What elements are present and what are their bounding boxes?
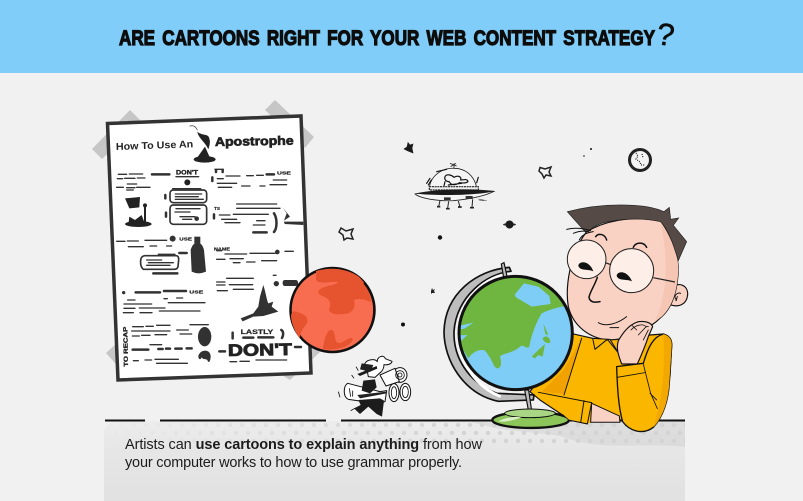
caption text: Artists can use cartoons to explain anything from how bbox=[125, 437, 483, 453]
glasses bbox=[567, 240, 675, 293]
rounded example boxes bbox=[170, 190, 207, 224]
star filled bbox=[404, 142, 413, 153]
forearm left sleeve bbox=[538, 338, 620, 424]
table line bbox=[105, 420, 685, 422]
hand bbox=[617, 321, 653, 364]
globe bbox=[453, 270, 572, 390]
ear bbox=[671, 285, 688, 306]
tiny ringed planet bbox=[503, 220, 516, 228]
poster heading: Apostrophe bbox=[215, 134, 294, 149]
face shading bbox=[654, 221, 678, 323]
stars and small space objects bbox=[339, 142, 650, 326]
head bbox=[364, 356, 392, 377]
tape strips bbox=[92, 100, 320, 380]
scroll bundle bbox=[400, 383, 411, 401]
USE label: USE bbox=[277, 171, 292, 177]
poster lower half: USE bbox=[189, 289, 204, 295]
poster heading: How To Use An bbox=[116, 139, 193, 153]
speech bubble bbox=[141, 256, 179, 269]
LASTLY DON'T panel: DON'T bbox=[228, 340, 292, 360]
mountain icon bbox=[241, 285, 278, 321]
head bbox=[567, 219, 678, 340]
poster heading bbox=[116, 134, 294, 153]
bottom text panel bbox=[104, 421, 685, 501]
UFO bbox=[415, 163, 494, 209]
hair bbox=[567, 205, 687, 261]
poster middle bbox=[117, 236, 230, 251]
poster: How to use an apostrophe bbox=[108, 116, 311, 380]
poster top half bbox=[116, 126, 303, 232]
poster middle: USE bbox=[179, 237, 193, 243]
caption text: your computer works to how to use grammar properly. bbox=[125, 455, 462, 471]
small island icon bbox=[125, 197, 152, 227]
eyebrows bbox=[596, 234, 647, 247]
rolled sleeve bbox=[617, 334, 672, 432]
hair wisps bbox=[567, 228, 593, 240]
shirt body bbox=[530, 334, 672, 423]
star outline right bbox=[539, 167, 551, 178]
dark clothing bbox=[354, 366, 384, 417]
cartoon character carrying scrolls bbox=[338, 356, 411, 417]
moon bbox=[630, 150, 650, 170]
DON'T label: DON'T bbox=[176, 171, 198, 177]
apostrophe icon bbox=[190, 126, 216, 163]
planet: red bbox=[290, 268, 374, 352]
mouth bbox=[598, 317, 627, 328]
globe stand arc bbox=[444, 263, 534, 414]
title: ARE CARTOONS RIGHT FOR YOUR WEB CONTENT STRATEGY bbox=[119, 27, 655, 50]
title: ? bbox=[655, 16, 677, 53]
title bbox=[119, 16, 677, 53]
poster top half: TS bbox=[214, 206, 220, 211]
star outline left bbox=[339, 228, 353, 240]
collar bbox=[593, 338, 619, 353]
poster lower half bbox=[122, 237, 301, 367]
header band bbox=[0, 0, 803, 73]
man with globe bbox=[444, 205, 688, 432]
eyes bbox=[578, 262, 632, 281]
large scroll bbox=[344, 383, 387, 403]
dots bbox=[401, 148, 592, 326]
LASTLY DON'T panel bbox=[228, 330, 292, 360]
poster middle: NAME bbox=[214, 246, 230, 251]
caption text bbox=[125, 437, 483, 471]
globe base bbox=[492, 409, 569, 428]
TO RECAP label: TO RECAP bbox=[123, 327, 130, 367]
small star bbox=[431, 288, 435, 294]
LASTLY DON'T panel: LASTLY bbox=[241, 330, 273, 336]
nose bbox=[589, 277, 600, 302]
